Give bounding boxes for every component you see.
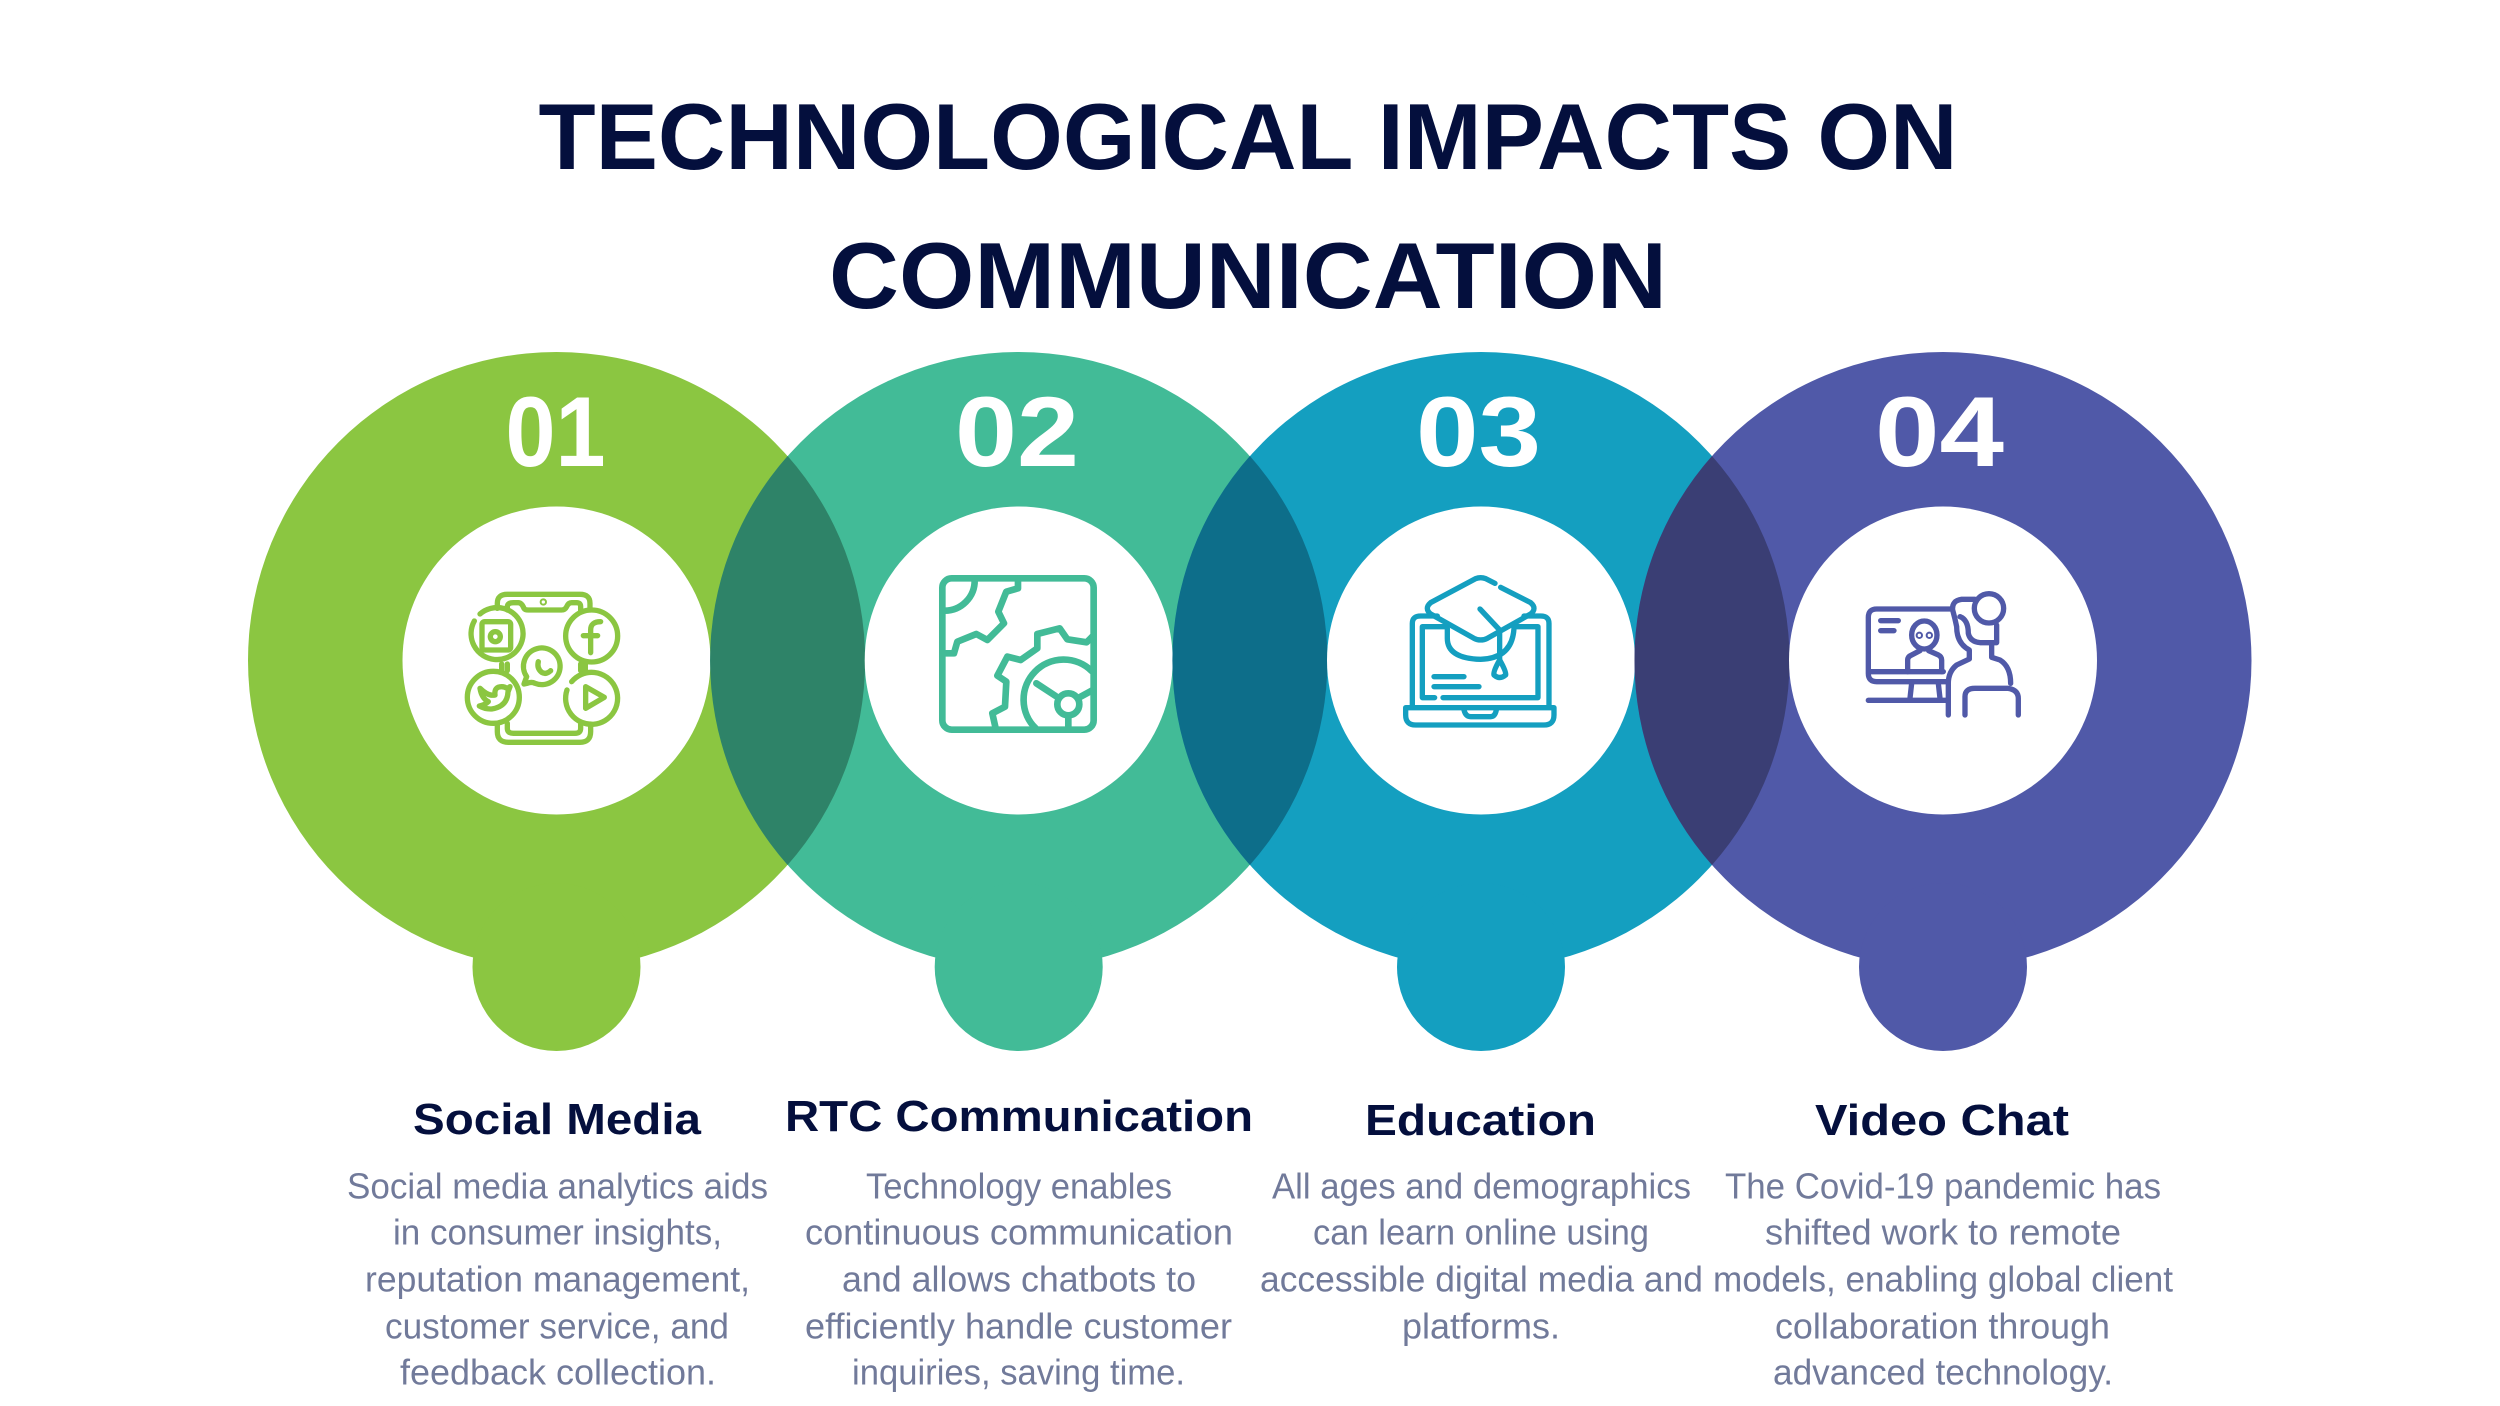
text block: rtc communication: and allows chatbots to	[842, 1258, 1196, 1300]
text block: education: can learn online using	[1313, 1212, 1649, 1252]
text block: social media: in consumer insights,	[393, 1212, 722, 1252]
purple circle with tab	[1634, 352, 2252, 1051]
title: COMMUNICATION	[829, 223, 1667, 328]
text block: rtc communication: continuous communication	[805, 1212, 1233, 1252]
text block: rtc communication: efficiently handle customer	[805, 1306, 1232, 1346]
number 04: 04	[1875, 376, 2004, 487]
number 03: 03	[1416, 376, 1541, 487]
text block: video chat: models, enabling global client	[1713, 1258, 2173, 1300]
white icon disc	[865, 506, 1173, 814]
overlap lens	[1172, 456, 1327, 865]
text block: social media	[347, 1166, 768, 1392]
number 02: 02	[955, 376, 1079, 487]
text block: video chat	[1713, 1166, 2173, 1392]
text block: social media: customer service, and	[385, 1306, 729, 1346]
heading: social media: Social Media	[413, 1095, 702, 1144]
text block: social media: reputation management,	[365, 1258, 750, 1300]
text block: video chat: collaboration through	[1775, 1306, 2110, 1346]
title: TECHNOLOGICAL IMPACTS ON	[538, 84, 1958, 189]
text block: rtc communication	[805, 1166, 1233, 1392]
number 01: 01	[506, 376, 606, 487]
text block: social media: Social media analytics aids	[347, 1166, 768, 1206]
icon: gears and steering wheel	[942, 578, 1094, 730]
overlap lens	[710, 456, 865, 865]
panel: social media	[248, 352, 865, 1392]
title	[538, 84, 1958, 328]
panel: rtc communication	[710, 352, 1327, 1392]
text block: education: All ages and demographics	[1272, 1166, 1691, 1206]
text block: video chat: The Covid-19 pandemic has	[1725, 1166, 2161, 1206]
heading: rtc communication: RTC Communication	[785, 1092, 1253, 1141]
heading: education: Education	[1365, 1096, 1596, 1145]
text block: rtc communication: Technology enables	[866, 1166, 1172, 1206]
blue circle with tab	[1172, 352, 1790, 1051]
teal circle with tab	[710, 352, 1327, 1051]
panel: video chat	[1634, 352, 2252, 1392]
white icon disc	[402, 506, 710, 814]
text block: video chat: advanced technology.	[1773, 1352, 2113, 1392]
text block: education: platforms.	[1402, 1306, 1560, 1346]
text block: rtc communication: inquiries, saving time.	[852, 1352, 1185, 1392]
overlap lens	[1634, 456, 1790, 865]
text block: video chat: shifted work to remote	[1765, 1212, 2121, 1252]
white icon disc	[1327, 506, 1635, 814]
text block: education	[1260, 1166, 1703, 1346]
text block: social media: feedback collection.	[400, 1352, 716, 1392]
heading: video chat: Video Chat	[1815, 1096, 2069, 1145]
green circle with tab	[248, 352, 865, 1051]
white icon disc	[1789, 506, 2097, 814]
icon: phone with social apps	[467, 594, 618, 742]
icon: person on video call	[1868, 594, 2018, 715]
icon: graduation cap on laptop	[1406, 578, 1554, 725]
panel: education	[1172, 352, 1790, 1346]
text block: education: accessible digital media and	[1260, 1258, 1703, 1300]
